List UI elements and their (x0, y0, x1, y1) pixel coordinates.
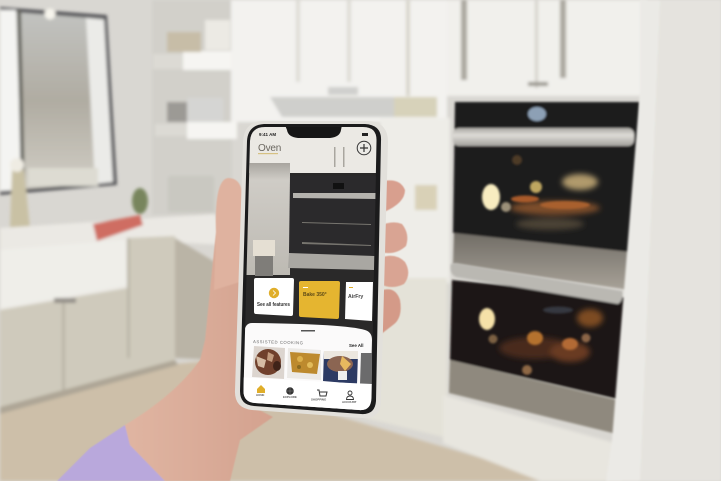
lower cabinets left (0, 236, 215, 407)
status icons (362, 133, 368, 136)
hand and sleeve (57, 178, 408, 481)
see all features card (254, 278, 294, 316)
finger 4 (380, 289, 401, 335)
status bar time: 9:41 AM (259, 132, 276, 137)
faucet and plant (10, 158, 148, 228)
assisted cooking sheet (243, 323, 372, 410)
recipe image 2 (287, 348, 321, 380)
finger 3 (380, 256, 408, 287)
thumb (214, 178, 246, 290)
home tab: HOME (256, 393, 265, 397)
finger 1 (384, 180, 405, 212)
recipe image 1 (252, 346, 285, 379)
lower cabinet right of phone (365, 278, 447, 438)
wall area right of phone (380, 118, 450, 283)
recipe image 3 (323, 351, 358, 384)
window (0, 7, 117, 195)
upper oven (453, 102, 640, 290)
bake card (299, 281, 340, 319)
finger 2 (380, 222, 407, 253)
title underline (258, 153, 278, 154)
oven in app (288, 176, 378, 270)
add button (357, 141, 371, 155)
account tab: ACCOUNT (342, 400, 357, 404)
recipe image 4 (360, 353, 372, 385)
phone (235, 120, 388, 420)
air fry card (345, 282, 373, 321)
floor (0, 360, 560, 481)
tab bar (243, 377, 372, 410)
lower oven (449, 263, 630, 436)
assisted cooking label: ASSISTED COOKING (253, 339, 304, 345)
notch (286, 127, 342, 138)
cabinet under ovens (443, 395, 622, 481)
wrist and palm (125, 232, 273, 481)
bake card: Bake 350° (303, 292, 327, 298)
app wall image (240, 127, 380, 276)
shelves (152, 0, 237, 215)
see all link: See All (349, 343, 363, 348)
right column (606, 0, 721, 481)
explore tab: EXPLORE (283, 395, 297, 399)
air fry card: AirFry (348, 294, 363, 300)
oven title: Oven (258, 143, 281, 154)
sleeve (57, 425, 165, 481)
phone bezel (240, 124, 381, 414)
top cabinets right (447, 0, 647, 96)
shopping tab: SHOPPING (311, 398, 327, 402)
upper cabinets centre (231, 0, 447, 122)
counter and sink (0, 214, 225, 310)
screen background (245, 173, 376, 356)
phone body (235, 121, 388, 418)
see all features card: See all features (257, 302, 290, 308)
